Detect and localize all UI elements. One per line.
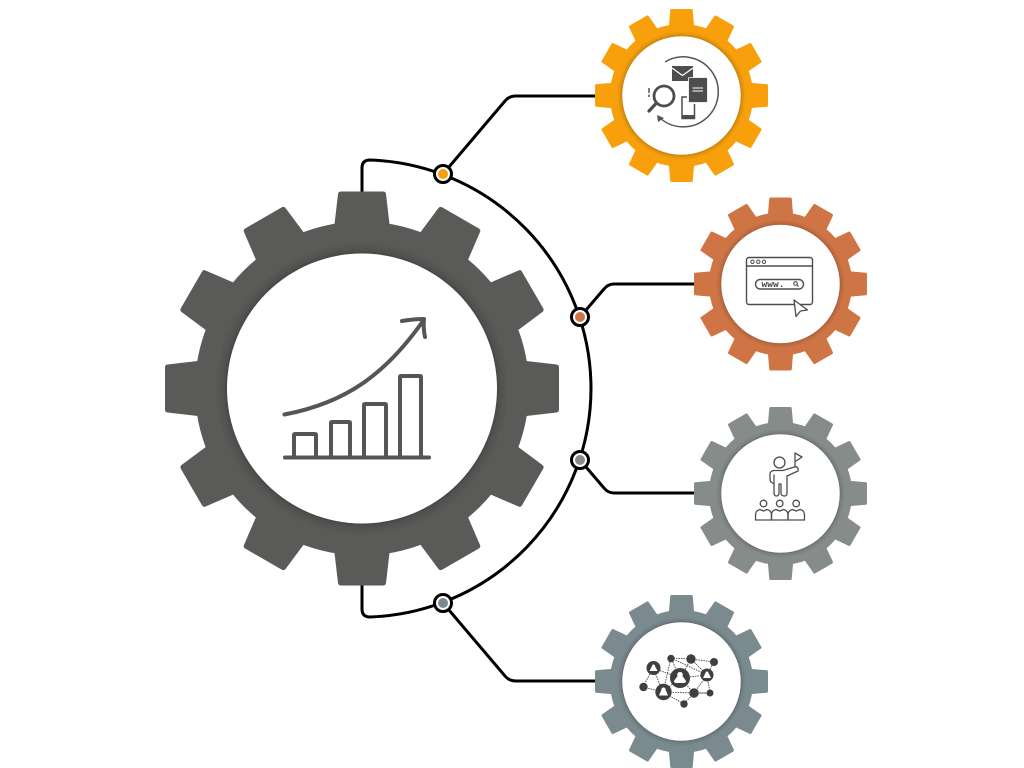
icon: leader with flag and audience <box>756 453 804 520</box>
icon: people network <box>639 654 718 708</box>
gear: grey <box>694 407 867 580</box>
icon: growth chart <box>284 319 429 458</box>
main gear <box>165 192 559 586</box>
node: terracotta <box>572 308 588 326</box>
gear: terracotta <box>694 198 867 370</box>
node: orange <box>434 166 452 182</box>
gear: slate <box>595 595 768 768</box>
icon: browser window <box>746 258 812 316</box>
gear: orange <box>595 9 768 182</box>
node: slate <box>434 594 452 612</box>
node: grey <box>572 452 588 468</box>
connector lines <box>362 96 700 681</box>
icon: browser window: www. <box>762 279 784 290</box>
icon: search and documents <box>649 57 718 127</box>
